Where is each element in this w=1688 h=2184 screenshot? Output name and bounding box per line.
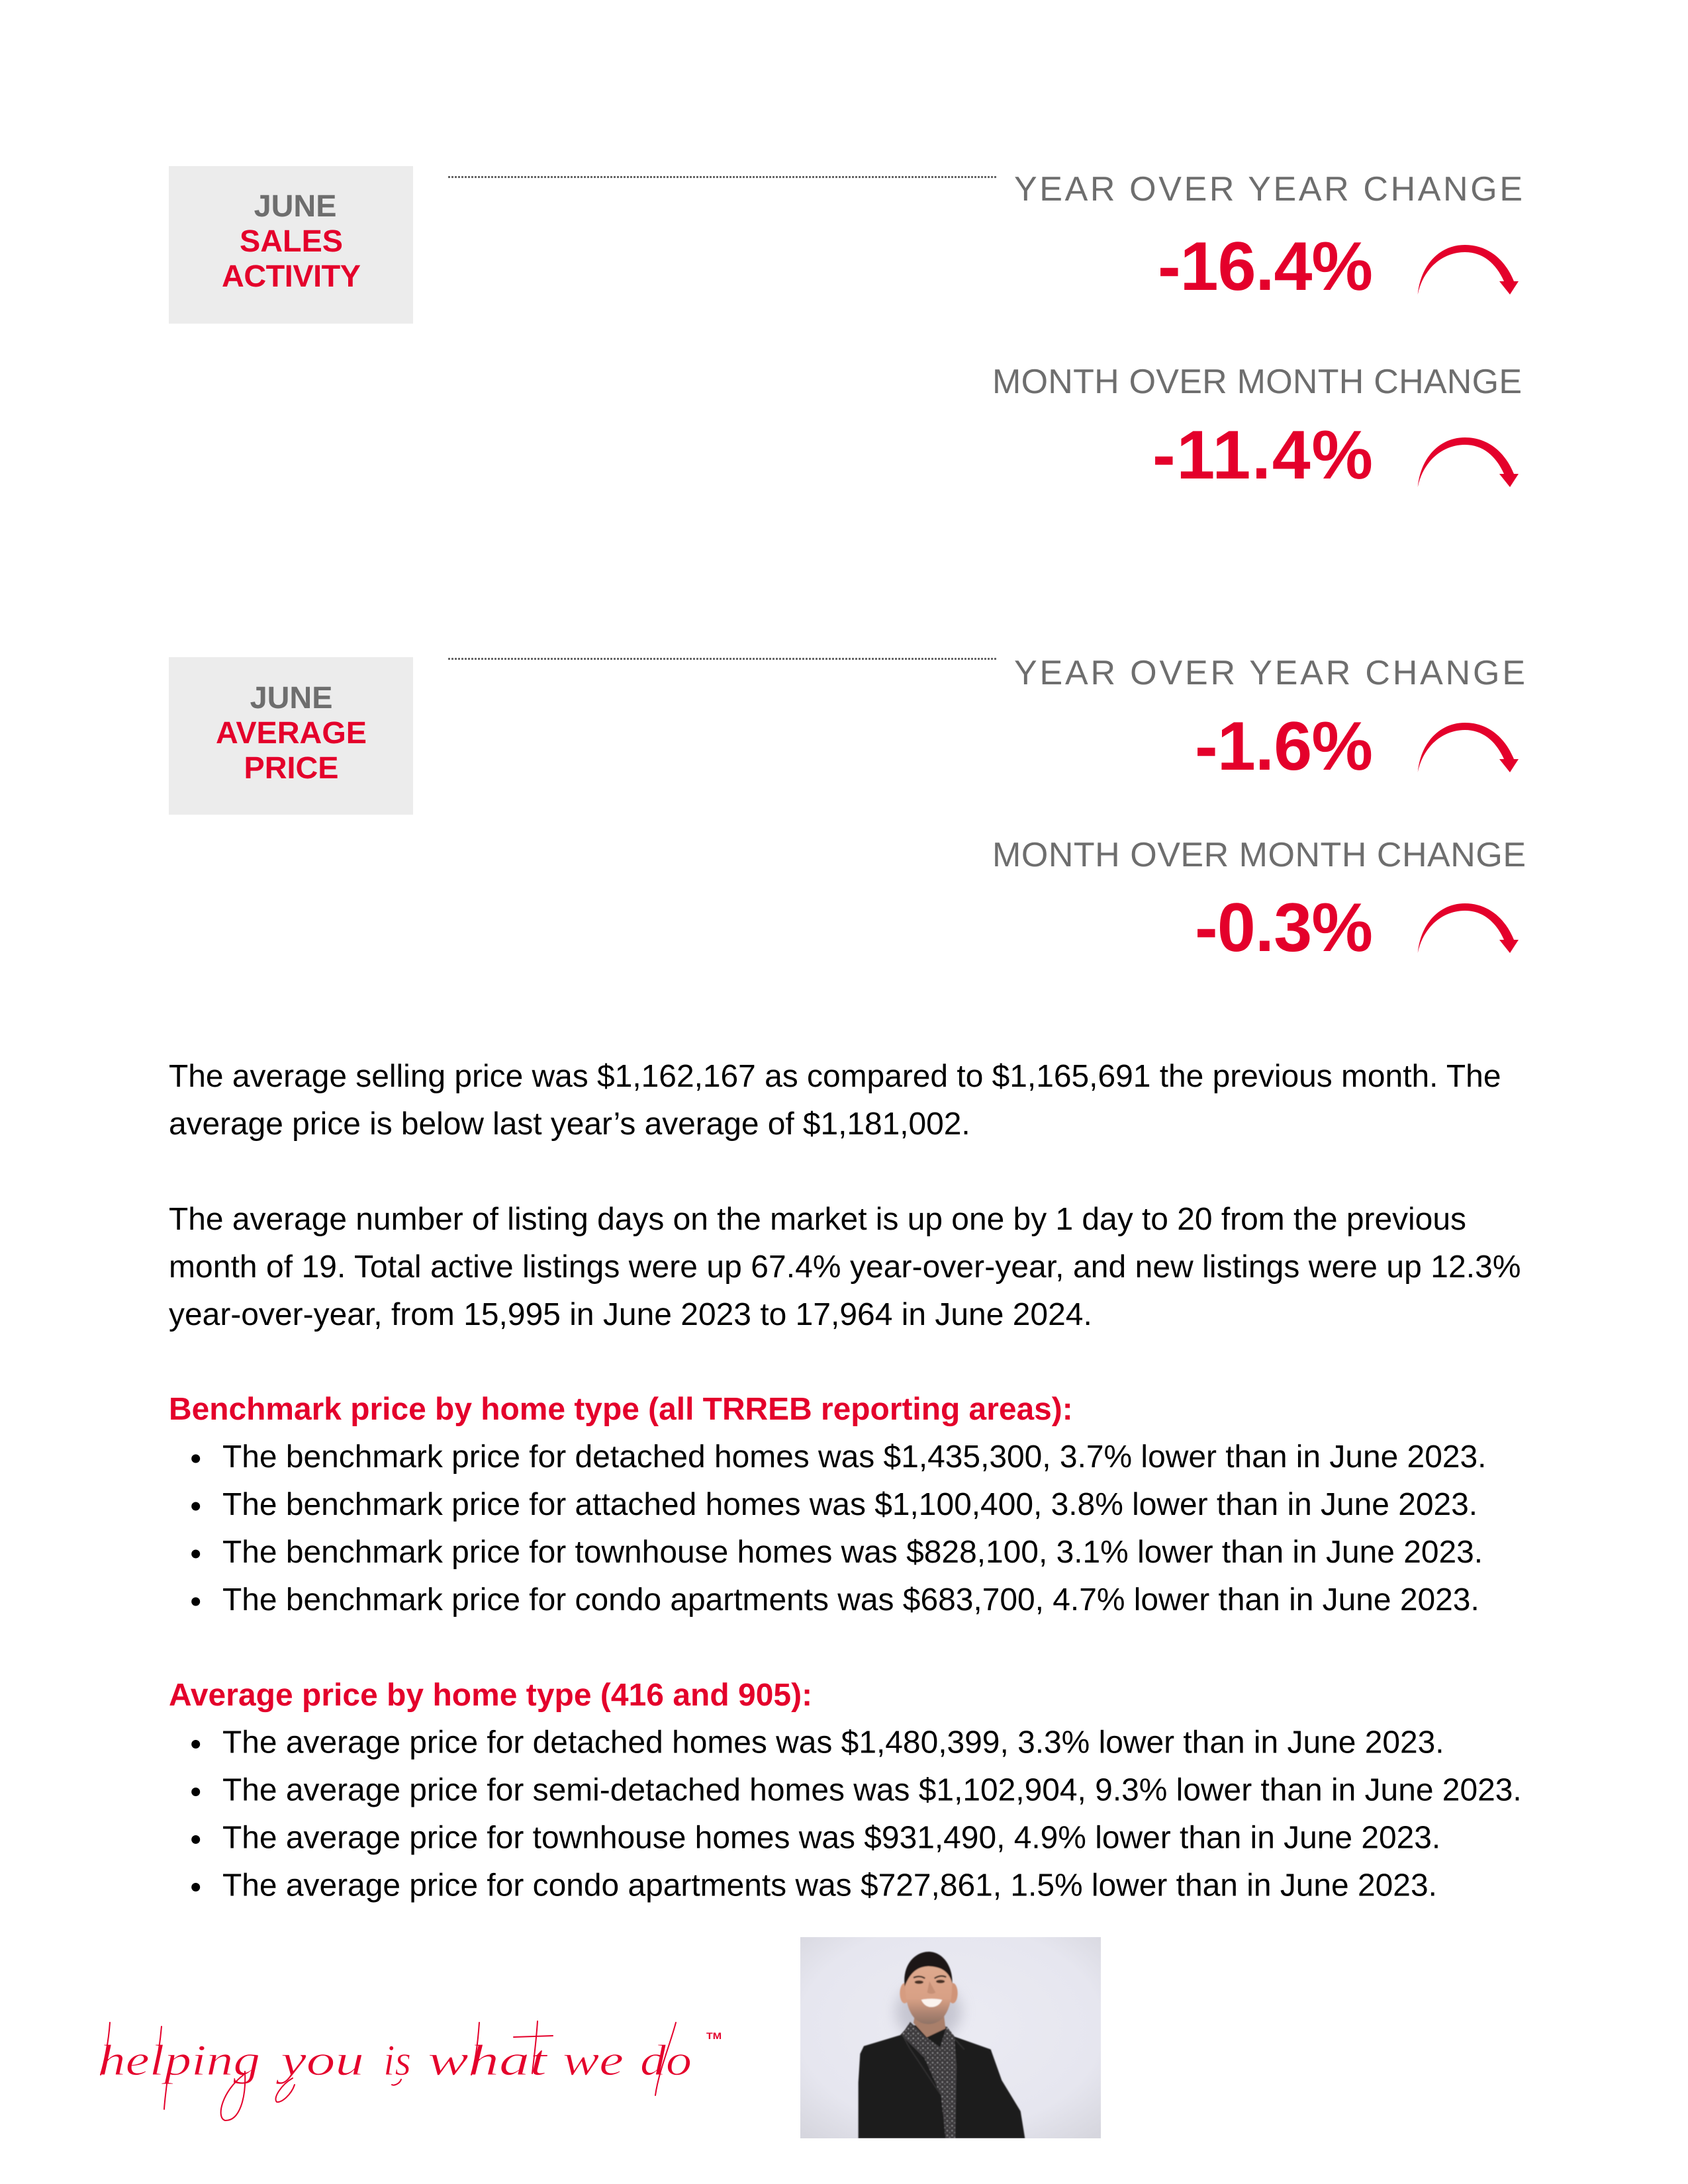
- tagline: helping you is what we do: you: [275, 2036, 364, 2085]
- heading: year over year change: YEAR OVER YEAR CHANGE: [1014, 654, 1525, 692]
- text block: listing days and listings: month of 19. Total active listings were up 67.4% year-over-year, and new listings were up 12.3%: [169, 1250, 1521, 1285]
- list: average prices: The average price for semi-detached homes was $1,102,904, 9.3% lower than in June 2023.: [222, 1772, 1522, 1808]
- label box: June sales activity: SALES: [240, 224, 343, 258]
- label box: June average price: [169, 657, 413, 815]
- number: year over year -1.6%: -1.6%: [1195, 708, 1373, 785]
- tagline: helping you is what we do: [99, 2021, 722, 2120]
- text block: average selling price: The average selling price was $1,162,167 as compared to $1,165,691 the previous month. The: [169, 1059, 1501, 1094]
- number: year over year -16.4%: -16.4%: [1158, 228, 1373, 305]
- tagline: helping you is what we do: do: [640, 2036, 692, 2085]
- list: average prices: The average price for townhouse homes was $931,490, 4.9% lower than in June 2023.: [222, 1820, 1440, 1856]
- text block: average selling price: [169, 1059, 1501, 1142]
- text block: listing days and listings: [169, 1202, 1521, 1332]
- label box: June sales activity: [169, 166, 413, 324]
- tagline: helping you is what we do: what: [428, 2036, 548, 2085]
- tagline: helping you is what we do: we: [563, 2036, 624, 2085]
- tagline: helping you is what we do: TM: [706, 2030, 722, 2041]
- label box: June average price: AVERAGE: [216, 715, 367, 750]
- icon: down arrow: [1418, 245, 1519, 295]
- text block: average selling price: average price is below last year’s average of $1,181,002.: [169, 1107, 970, 1142]
- tagline: helping you is what we do: helping: [99, 2036, 260, 2085]
- icon: down arrow: [1418, 437, 1519, 487]
- text block: listing days and listings: year-over-year, from 15,995 in June 2023 to 17,964 in June 2024.: [169, 1297, 1092, 1332]
- panel: June average price: [169, 654, 1526, 966]
- heading: year over year change: YEAR OVER YEAR CHANGE: [1014, 170, 1523, 208]
- panel: June sales activity: [169, 166, 1523, 494]
- label box: June average price: JUNE: [250, 680, 332, 715]
- label box: June sales activity: JUNE: [254, 189, 336, 223]
- list: average prices: The average price for condo apartments was $727,861, 1.5% lower than in June 2023.: [222, 1868, 1437, 1903]
- list: benchmark prices: The benchmark price for townhouse homes was $828,100, 3.1% lower than in June 2023.: [222, 1535, 1483, 1570]
- number: month over month -11.4%: -11.4%: [1152, 417, 1373, 494]
- heading: month over month change: MONTH OVER MONTH CHANGE: [992, 363, 1522, 401]
- text block: listing days and listings: The average number of listing days on the market is up one by 1 day to 20 from the previous: [169, 1202, 1466, 1237]
- photo: smiling man in black blazer: [800, 1937, 1101, 2138]
- list: average prices: The average price for detached homes was $1,480,399, 3.3% lower than in June 2023.: [222, 1725, 1444, 1760]
- list: benchmark prices: The benchmark price for attached homes was $1,100,400, 3.8% lower than in June 2023.: [222, 1487, 1477, 1522]
- label box: June average price: PRICE: [244, 751, 339, 785]
- label box: June sales activity: ACTIVITY: [222, 259, 361, 293]
- tagline: helping you is what we do: is: [383, 2036, 411, 2085]
- list: benchmark prices: The benchmark price for condo apartments was $683,700, 4.7% lower than in June 2023.: [222, 1582, 1479, 1617]
- heading: benchmark price by home type: Benchmark price by home type (all TRREB reporting areas):: [169, 1392, 1073, 1427]
- heading: month over month change: MONTH OVER MONTH CHANGE: [992, 836, 1526, 874]
- list: average prices: [191, 1725, 1522, 1903]
- list: benchmark prices: The benchmark price for detached homes was $1,435,300, 3.7% lower than in June 2023.: [222, 1439, 1486, 1475]
- icon: down arrow: [1418, 723, 1519, 772]
- list: benchmark prices: [191, 1439, 1486, 1617]
- number: month over month -0.3%: -0.3%: [1195, 889, 1373, 966]
- heading: average price by home type: Average price by home type (416 and 905):: [169, 1678, 812, 1713]
- icon: down arrow: [1418, 903, 1519, 953]
